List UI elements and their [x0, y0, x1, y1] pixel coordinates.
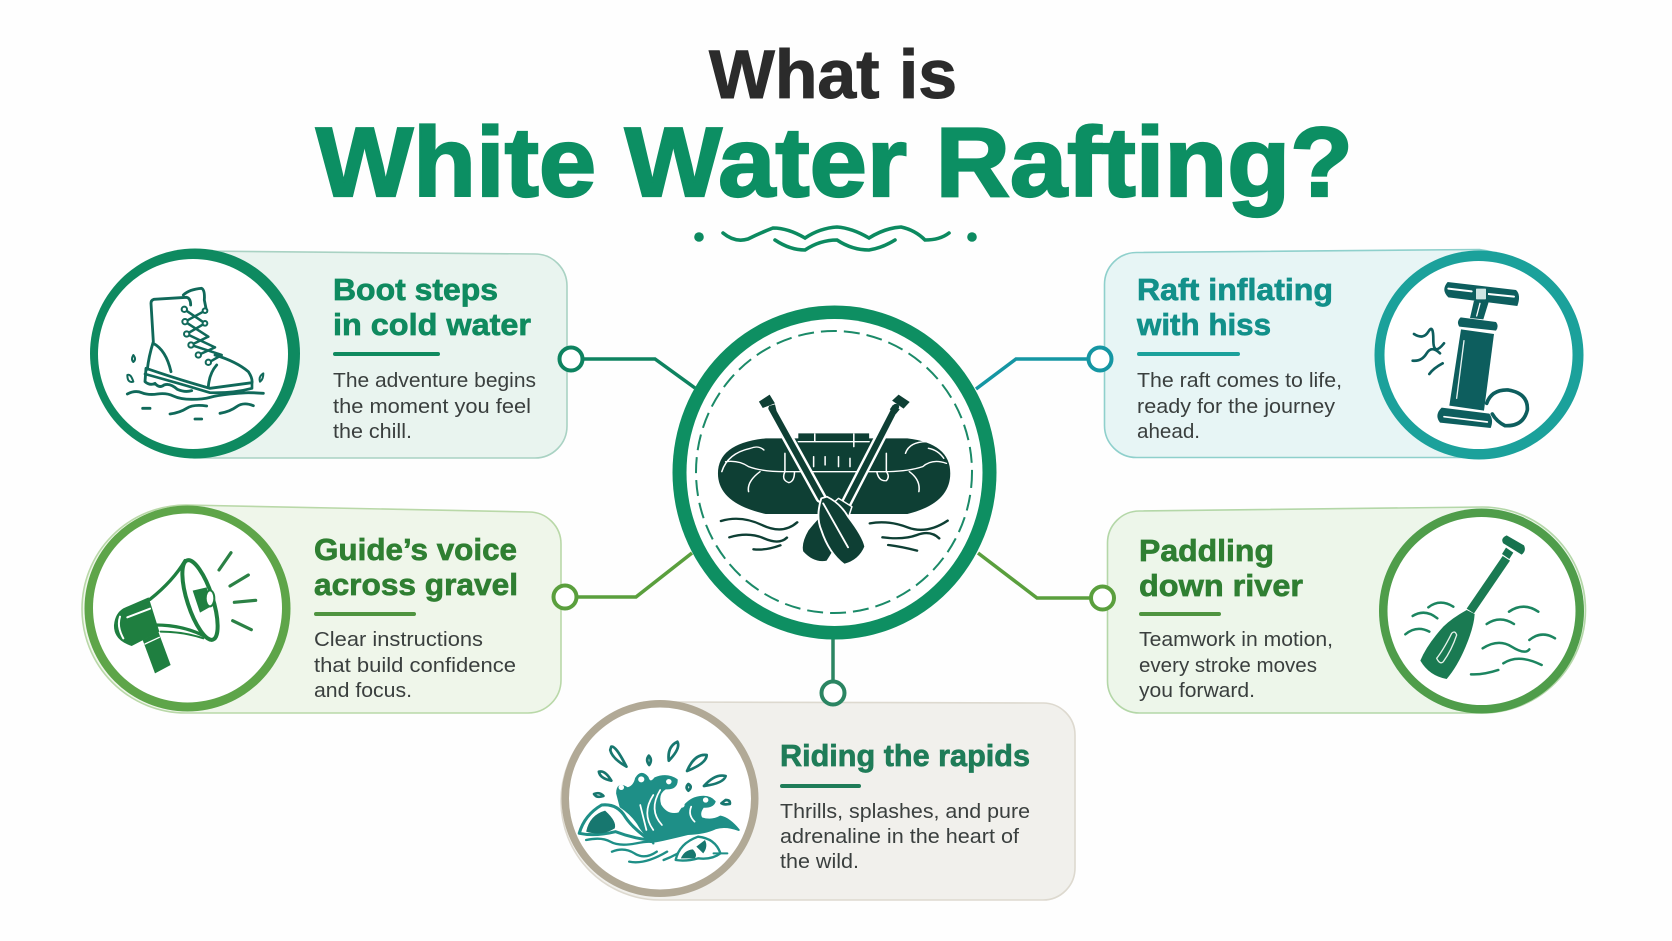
- text block: and focus.: [314, 679, 412, 702]
- heading: with hiss: [1136, 307, 1271, 342]
- connector: paddle: [978, 553, 1090, 598]
- text block: [333, 369, 536, 443]
- heading: across gravel: [314, 567, 518, 602]
- heading: Paddling: [1139, 533, 1274, 568]
- text block: the moment you feel: [333, 395, 531, 418]
- icon: paddle in water: [1405, 535, 1555, 679]
- node: rapids connector: [822, 682, 844, 704]
- heading: [314, 532, 518, 602]
- heading: [333, 272, 531, 342]
- node: paddle connector: [1091, 586, 1114, 610]
- text block: [1137, 369, 1342, 443]
- panel: boot: [90, 248, 567, 458]
- text block: the chill.: [333, 420, 412, 443]
- text block: The raft comes to life,: [1137, 369, 1342, 392]
- text block: Thrills, splashes, and pure: [780, 800, 1030, 823]
- text block: [1139, 628, 1333, 702]
- panel: megaphone: [82, 505, 561, 713]
- heading: down river: [1139, 568, 1303, 603]
- heading: Boot steps: [333, 272, 498, 307]
- heading: Riding the rapids: [780, 738, 1030, 773]
- text block: adrenaline in the heart of: [780, 825, 1019, 848]
- heading: in cold water: [333, 307, 531, 342]
- text block: the wild.: [780, 850, 859, 873]
- panel: rapids: [561, 700, 1075, 900]
- heading: [1139, 533, 1303, 603]
- node: pump connector: [1088, 348, 1112, 370]
- text block: The adventure begins: [333, 369, 536, 392]
- icon: boot in water: [127, 288, 263, 419]
- connector: pump: [976, 359, 1087, 389]
- heading: [1136, 272, 1333, 342]
- title: [316, 36, 1353, 217]
- connector: boot: [584, 359, 695, 388]
- text block: [314, 628, 516, 702]
- title: White Water Rafting?: [316, 107, 1353, 217]
- text block: [780, 800, 1030, 873]
- title wave ornament: [694, 227, 977, 250]
- text block: that build confidence: [314, 654, 516, 677]
- text block: ready for the journey: [1137, 395, 1336, 418]
- panel: paddle: [1108, 507, 1586, 714]
- text block: Clear instructions: [314, 628, 483, 651]
- node: megaphone connector: [554, 586, 576, 608]
- connector: rapids: [831, 638, 835, 681]
- heading: Guide’s voice: [314, 532, 517, 567]
- icon: raft: [718, 395, 950, 565]
- heading: Raft inflating: [1137, 272, 1333, 307]
- panel: pump: [1104, 250, 1584, 460]
- text block: Teamwork in motion,: [1139, 628, 1333, 651]
- node: boot connector: [560, 348, 582, 370]
- connector: megaphone: [578, 553, 692, 597]
- icon: megaphone: [114, 553, 256, 673]
- title: What is: [709, 36, 957, 113]
- center medallion: raft and paddles: [672, 306, 996, 640]
- icon: air pump: [1413, 282, 1527, 428]
- text block: ahead.: [1137, 420, 1200, 443]
- text block: every stroke moves: [1139, 654, 1317, 677]
- text block: you forward.: [1139, 679, 1255, 702]
- icon: splash and rocks: [579, 742, 739, 862]
